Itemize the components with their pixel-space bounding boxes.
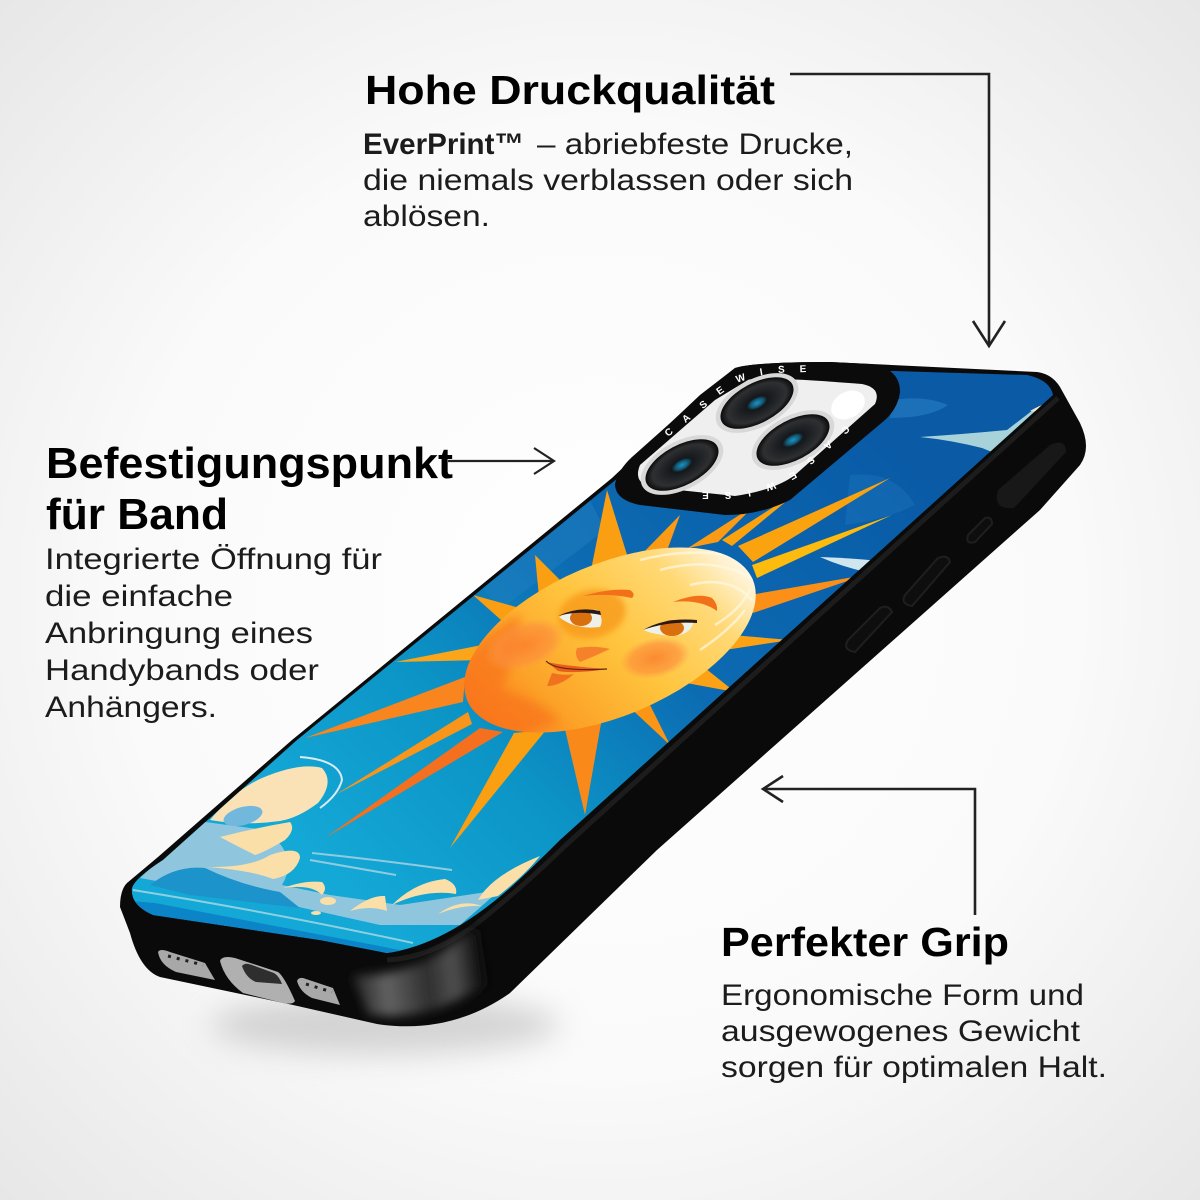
heading: Perfekter Grip — [721, 919, 1009, 965]
side buttons — [846, 443, 1066, 652]
lens top — [706, 361, 808, 445]
body text: – abriebfeste Drucke, — [537, 128, 853, 161]
body text: die niemals verblassen oder sich — [363, 164, 853, 197]
phone shadow — [210, 995, 560, 1055]
camera frame — [615, 362, 900, 515]
horizon band — [132, 889, 414, 953]
lens left — [631, 423, 733, 507]
lower left clouds — [140, 757, 540, 925]
inner rim highlight — [387, 398, 1058, 960]
cloud shadow — [140, 822, 500, 925]
body text: ablösen. — [363, 200, 490, 233]
flash — [826, 385, 870, 425]
body text: die einfache — [45, 580, 233, 613]
right eye — [643, 619, 697, 636]
body text: sorgen für optimalen Halt. — [721, 1051, 1107, 1084]
face shading — [450, 552, 755, 740]
phone case — [120, 362, 1086, 1026]
body text — [363, 128, 853, 233]
cream billows — [220, 822, 292, 855]
callout: grip — [721, 919, 1107, 1084]
brand ring text top: CASEWISE — [665, 365, 806, 436]
heading: Hohe Druckqualität — [365, 67, 775, 113]
cloud streaks — [310, 853, 452, 875]
body text: Anhängers. — [45, 691, 217, 724]
case body — [120, 362, 1086, 1026]
corner gloss — [352, 925, 488, 1016]
arrow: grip — [763, 776, 975, 915]
heading — [46, 439, 453, 539]
left eye — [558, 609, 602, 628]
callout: print quality — [363, 67, 853, 233]
body text: EverPrint™ — [363, 128, 524, 161]
sky brush strokes — [890, 398, 948, 418]
heading: Befestigungspunkt — [46, 439, 453, 488]
printed back — [132, 371, 1053, 953]
right clouds — [820, 402, 1051, 572]
brand ring text bottom: CASEWISE — [702, 426, 850, 499]
body text: Integrierte Öffnung für — [45, 543, 382, 576]
body text: ausgewogenes Gewicht — [721, 1015, 1081, 1048]
callout: strap attachment — [45, 439, 453, 724]
mouth — [547, 662, 607, 672]
right speaker — [297, 978, 340, 1005]
body text: Handybands oder — [45, 654, 319, 687]
lens right — [742, 398, 844, 482]
arrow: print quality — [790, 74, 1005, 346]
sun face — [464, 548, 756, 732]
heading: für Band — [46, 490, 228, 539]
face disc — [464, 548, 756, 732]
body text — [45, 543, 382, 724]
body text: Ergonomische Form und — [721, 979, 1084, 1012]
left speaker — [158, 950, 215, 980]
charging port — [220, 957, 295, 1004]
arrow: strap attachment — [448, 448, 554, 474]
camera island — [615, 362, 900, 515]
swirl cloud — [210, 766, 328, 823]
eyebrows — [583, 590, 634, 598]
body text: Anbringung eines — [45, 617, 313, 650]
body text — [721, 979, 1107, 1084]
sky — [132, 371, 1053, 953]
camera plate — [638, 379, 877, 496]
nose — [576, 647, 610, 662]
cheeks — [489, 622, 560, 668]
sun rays — [305, 478, 892, 848]
